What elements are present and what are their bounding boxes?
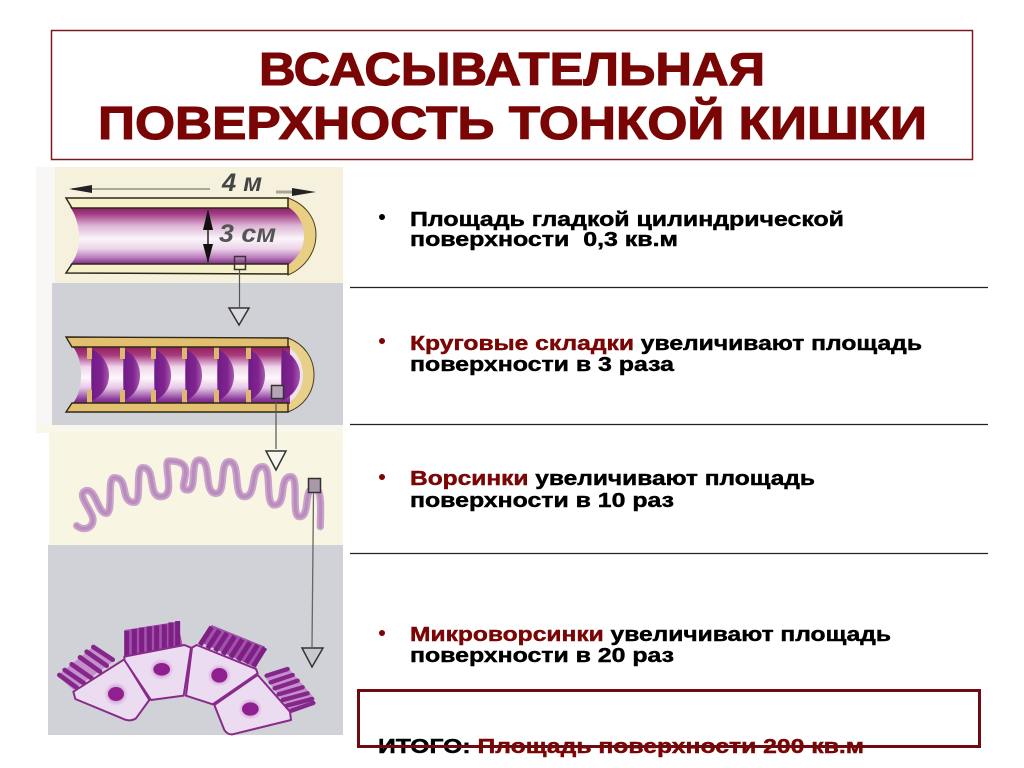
text block: microvilli — [379, 624, 891, 667]
text block: circular folds: Круговые складки увеличивают площадь — [410, 333, 922, 355]
cell nuclei — [104, 659, 262, 720]
text block: smooth surface: Площадь гладкой цилиндрической — [410, 209, 844, 231]
villi wavy line — [77, 460, 321, 529]
illustration panel: intestine surface levels — [36, 167, 343, 735]
text block: microvilli: поверхности в 20 раз — [410, 645, 674, 667]
epithelial cells with microvilli — [57, 621, 315, 734]
dimension: 4 m — [69, 169, 316, 197]
total callout: ИТОГО: Площадь поверхности 200 кв.м — [378, 736, 864, 758]
microvilli: cell 2 — [124, 621, 183, 657]
title — [98, 43, 927, 149]
title box — [52, 30, 972, 160]
dimension: 3 cm: 3 см — [219, 220, 276, 248]
text block: villi: Ворсинки увеличивают площадь — [410, 468, 815, 490]
smooth cylinder tube — [66, 169, 316, 275]
circular folds tube — [66, 337, 314, 412]
connector arrow 2 — [266, 386, 286, 470]
microvilli: cell 4 — [264, 667, 315, 712]
microvilli: cell 3 — [199, 625, 265, 668]
connector arrow 1 — [229, 256, 249, 325]
dimension: 4 m: 4 м — [221, 169, 262, 197]
divider lines — [350, 288, 988, 554]
cell bodies — [73, 645, 291, 734]
text block: villi: поверхности в 10 раз — [410, 490, 674, 512]
text block: smooth surface: поверхности 0,3 кв.м — [410, 229, 678, 251]
text block: smooth surface — [379, 209, 844, 251]
microvilli: cell 1 — [57, 646, 115, 690]
text block: microvilli: Микроворсинки увеличивают площадь — [410, 624, 891, 646]
panel background bands — [36, 167, 343, 735]
text block: circular folds: поверхности в 3 раза — [410, 354, 675, 376]
text block: circular folds — [379, 333, 922, 376]
connector arrow 3 — [302, 478, 323, 667]
text block: villi — [379, 468, 815, 512]
title: ПОВЕРХНОСТЬ ТОНКОЙ КИШКИ — [98, 97, 927, 149]
dimension: 3 cm — [203, 209, 276, 263]
total callout — [358, 690, 980, 758]
title: ВСАСЫВАТЕЛЬНАЯ — [259, 43, 765, 95]
